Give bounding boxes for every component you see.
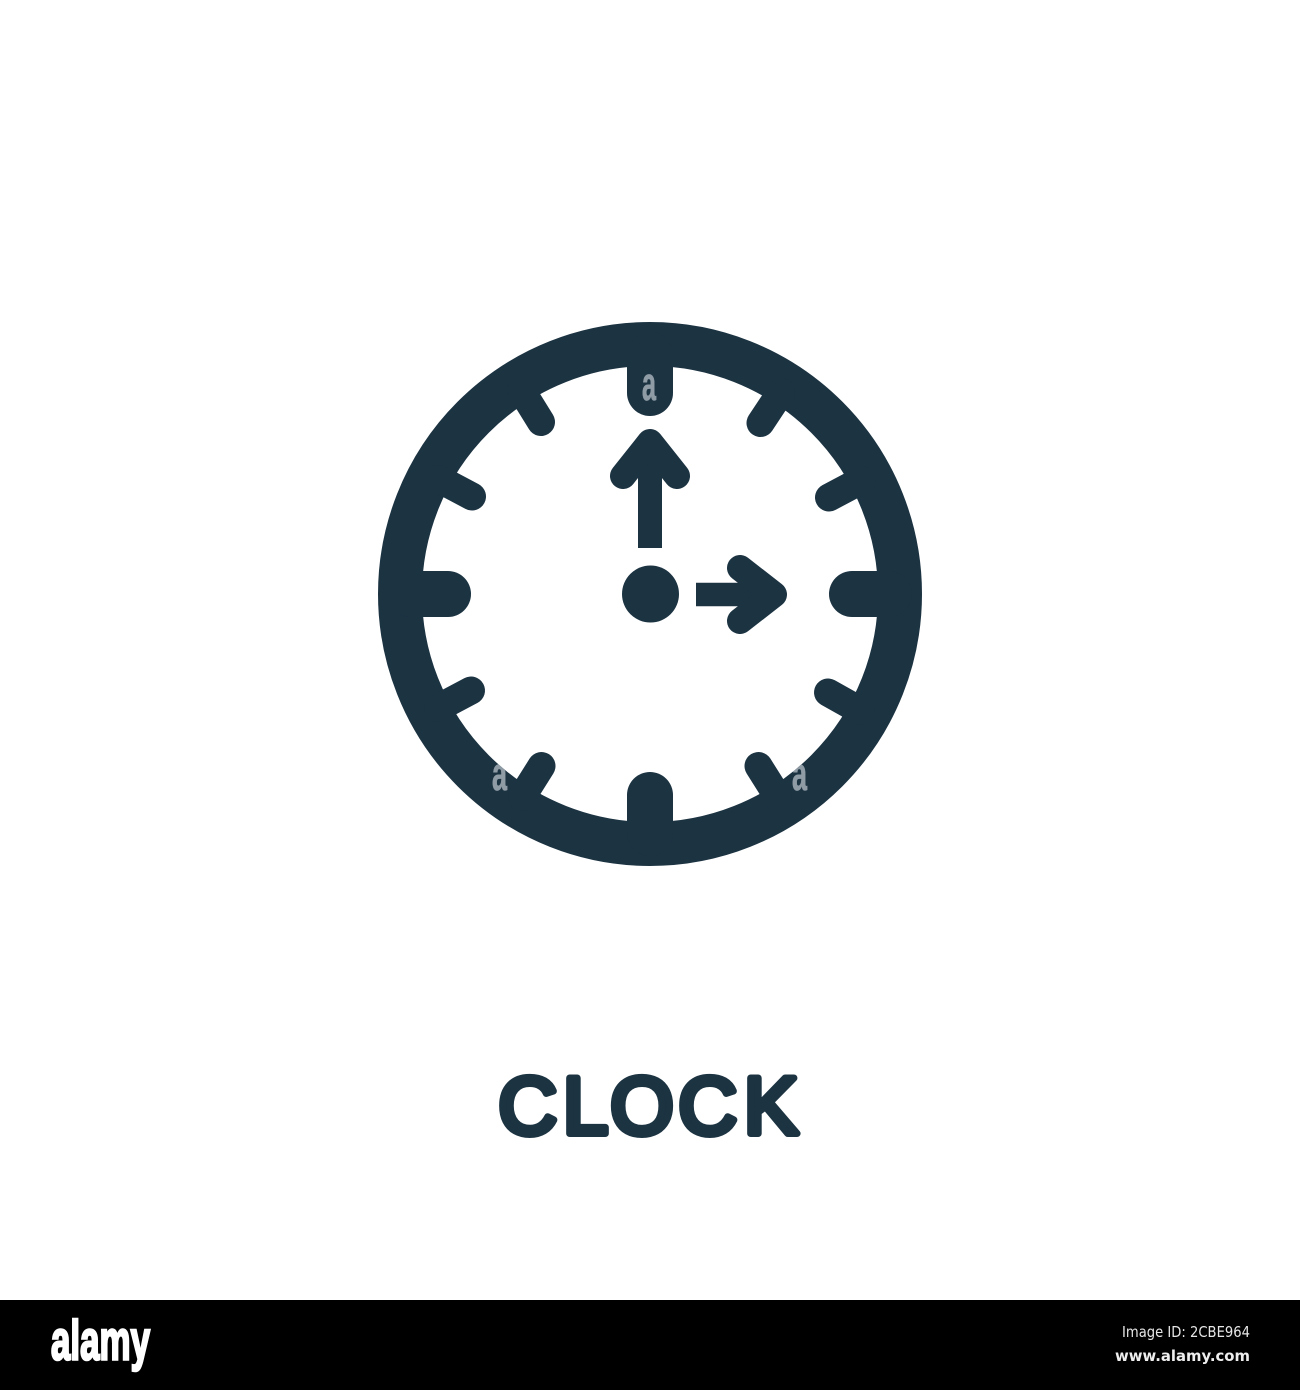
- footer logo: alamy: alamy: [51, 1308, 150, 1372]
- infographic canvas: [0, 322, 1300, 1390]
- minor hour ticks: [438, 390, 862, 797]
- major hour ticks: [411, 355, 889, 833]
- title: CLOCK: CLOCK: [498, 1062, 798, 1152]
- clock rim: [400, 344, 900, 844]
- footer image id: Image ID: 2CBE964: [1122, 1323, 1250, 1341]
- icon: clock: [400, 344, 900, 844]
- watermark letter in top tick: a: [642, 357, 656, 410]
- footer website: www.alamy.com: [1115, 1347, 1250, 1365]
- footer background: [0, 1300, 1300, 1390]
- arrow: minute hand pointing up: [623, 442, 677, 548]
- watermark letter lower right: a: [792, 747, 807, 800]
- footer bar: [0, 1300, 1300, 1390]
- center hub: [622, 566, 679, 622]
- arrow: hour hand pointing right: [696, 568, 774, 621]
- watermark letter lower left: a: [492, 747, 507, 800]
